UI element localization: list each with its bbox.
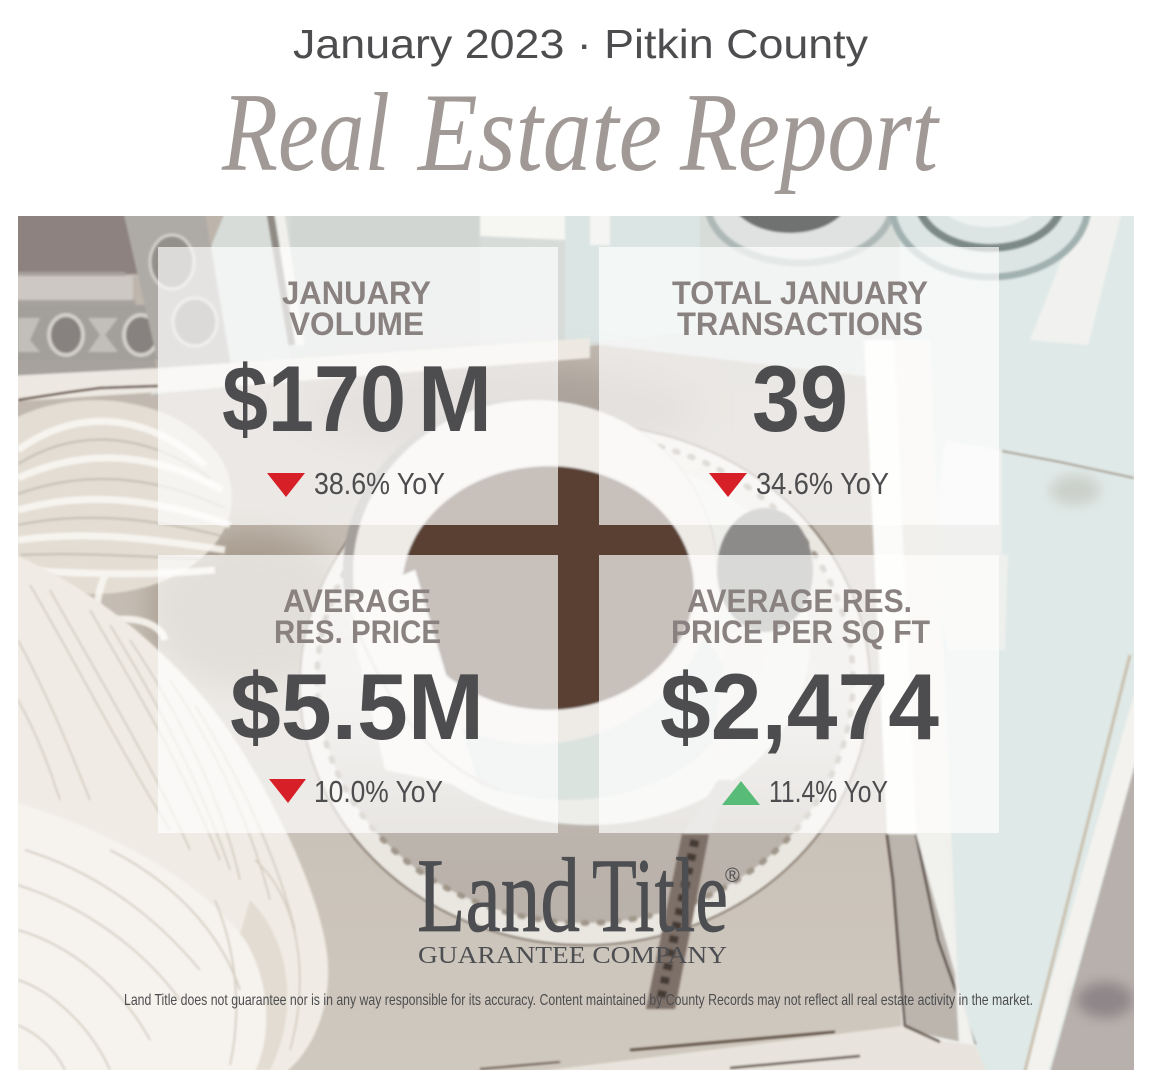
- heading: average res. price: [274, 583, 441, 650]
- panel: January volume: [158, 247, 558, 525]
- photo: glass jars: [705, 216, 1092, 282]
- panel: average residential price: [158, 555, 558, 833]
- photo: small yarn ball: [18, 399, 232, 641]
- value: $5.5M: $5.5M: [230, 654, 484, 759]
- logo: Land Title Guarantee Company: GUARANTEE COMPANY: [418, 943, 727, 969]
- panel: total January transactions: [599, 247, 999, 525]
- page title: Real Estate Report: [221, 71, 940, 195]
- heading: January volume: JANUARY: [282, 275, 431, 311]
- page heading: date and county: January 2023 · Pitkin County: [293, 21, 869, 67]
- heading: January volume: [282, 275, 431, 342]
- logo: Land Title Guarantee Company: Title: [592, 837, 728, 954]
- photo: spoon: [646, 508, 813, 1009]
- heading: January volume: VOLUME: [289, 306, 424, 342]
- logo: Land Title Guarantee Company: ®: [725, 865, 740, 887]
- heading: average res. price: AVERAGE: [283, 583, 431, 619]
- heading: total January transactions: TOTAL JANUARY: [672, 275, 928, 311]
- heading: total January transactions: [672, 275, 928, 342]
- value: $170M: $170: [222, 346, 406, 451]
- photo: cup and coffee: [343, 398, 730, 800]
- change: 11.4% YoY: 11.4% YoY: [769, 774, 888, 809]
- background photo: coffee cup, yarn and tray: [18, 216, 1134, 1070]
- photo: darker table around the cup: [150, 365, 700, 690]
- photo: tray bottom edge: [478, 1024, 984, 1070]
- photo: large yarn skein: [8, 552, 328, 1080]
- icon: red down triangle: [269, 779, 306, 803]
- page title: Real Estate Report: Real: [221, 71, 390, 195]
- photo: saucer: [300, 425, 870, 945]
- value: $2,474: $2,474: [660, 654, 939, 759]
- logo: Land Title Guarantee Company: Land: [417, 837, 580, 954]
- photo: upper surface and paper: [150, 200, 1150, 1080]
- panel: average residential price per square foot: [599, 555, 999, 833]
- photo: tray right frame: [864, 340, 1150, 1080]
- heading: average res. price per sq ft: [671, 583, 930, 650]
- page title: Real Estate Report: Estate: [416, 71, 662, 195]
- change: 10.0% YoY: 10.0% YoY: [314, 774, 443, 809]
- change: 38.6% YoY: 38.6% YoY: [314, 466, 445, 501]
- logo: Land Title Guarantee Company: [417, 837, 740, 969]
- icon: red down triangle: [267, 473, 305, 497]
- heading: average res. price: RES. PRICE: [274, 614, 441, 650]
- heading: total January transactions: TRANSACTIONS: [677, 306, 923, 342]
- value: $170M: M: [418, 346, 492, 451]
- page title: Real Estate Report: Report: [679, 71, 940, 195]
- change: 34.6% YoY: 34.6% YoY: [756, 466, 889, 501]
- heading: average res. price per sq ft: AVERAGE RES.: [687, 583, 912, 619]
- icon: green up triangle: [722, 781, 760, 805]
- photo: ornate frame: [8, 200, 590, 402]
- icon: red down triangle: [709, 473, 747, 497]
- value: 39: 39: [752, 346, 848, 451]
- heading: average res. price per sq ft: PRICE PER SQ FT: [671, 614, 930, 650]
